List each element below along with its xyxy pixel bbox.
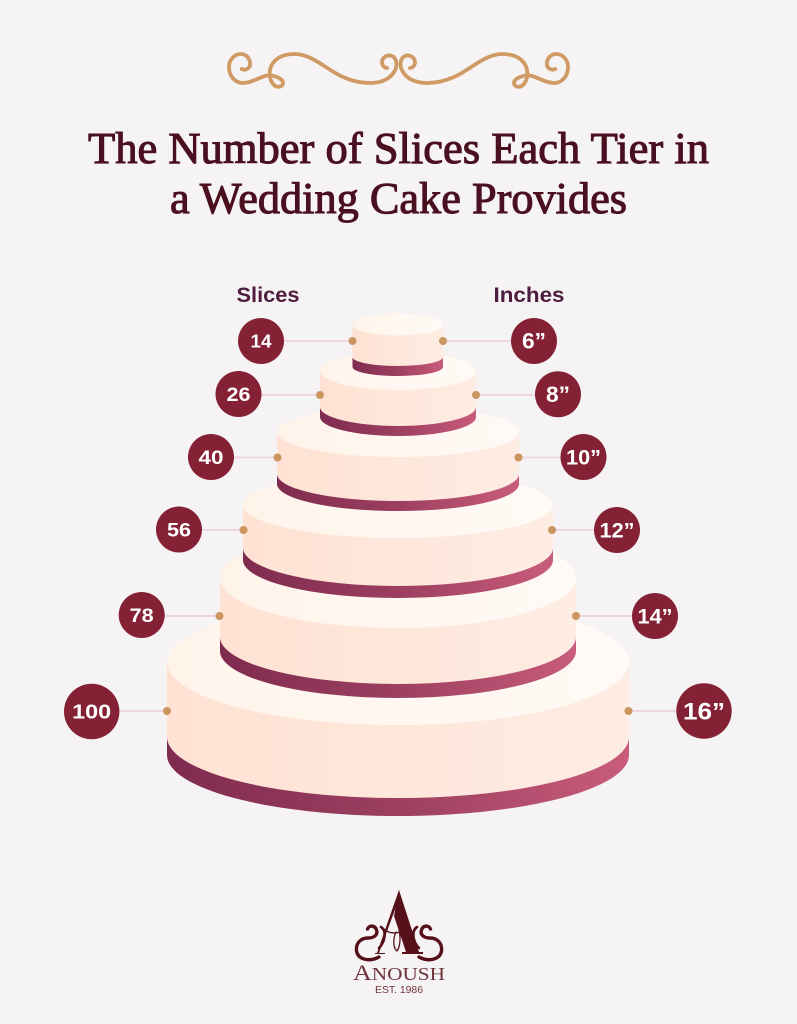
- callout: 26 slices: 26: [226, 385, 250, 406]
- logo monogram: [356, 890, 442, 960]
- callout: 56 slices: [156, 506, 248, 552]
- heading: inches: Inches: [494, 284, 564, 307]
- callout: 40 slices: 40: [198, 448, 224, 469]
- tier: 14 inch: [220, 528, 576, 698]
- callout: 56 slices: 56: [167, 520, 191, 542]
- callout: 12 inches: [548, 507, 640, 553]
- callout: 16 inches: 16”: [683, 698, 725, 726]
- callout: 6 inches: [439, 318, 557, 364]
- callout: 100 slices: 100: [72, 702, 111, 724]
- callout: 14 slices: 14: [250, 330, 272, 352]
- callout: 100 slices: [64, 684, 171, 739]
- tier: 10 inch: [277, 407, 519, 511]
- callout: 26 slices: [216, 371, 324, 417]
- logo: Anoush: [353, 890, 445, 996]
- callout: 14 inches: 14”: [638, 606, 672, 628]
- callout: 16 inches: [624, 683, 732, 739]
- callout: 40 slices: [188, 434, 282, 480]
- callout: 6 inches: 6”: [522, 328, 546, 354]
- callout: 78 slices: 78: [130, 606, 154, 627]
- tier: 8 inch: [320, 352, 476, 436]
- icon: decorative flourish: [229, 54, 568, 87]
- cake illustration: [167, 314, 629, 816]
- callout: 8 inches: 8”: [546, 382, 570, 407]
- callout: 12 inches: 12”: [600, 520, 634, 542]
- tier: 6 inch: [352, 314, 443, 376]
- logo wordmark: ANOUSH: [353, 960, 445, 985]
- title: [88, 124, 709, 223]
- callout: 14 slices: [238, 318, 356, 364]
- tier: 16 inch: [167, 599, 629, 816]
- logo established line: EST. 1986: [375, 984, 423, 996]
- title: The Number of Slices Each Tier in: [88, 124, 709, 173]
- callout: 14 inches: [572, 593, 678, 639]
- tier: 12 inch: [243, 472, 553, 598]
- heading: slices: Slices: [236, 284, 300, 307]
- callout: 10 inches: 10”: [566, 446, 601, 470]
- callout: 10 inches: [514, 434, 606, 480]
- title: a Wedding Cake Provides: [170, 174, 627, 223]
- callout: 78 slices: [119, 592, 224, 638]
- callout: 8 inches: [472, 371, 581, 417]
